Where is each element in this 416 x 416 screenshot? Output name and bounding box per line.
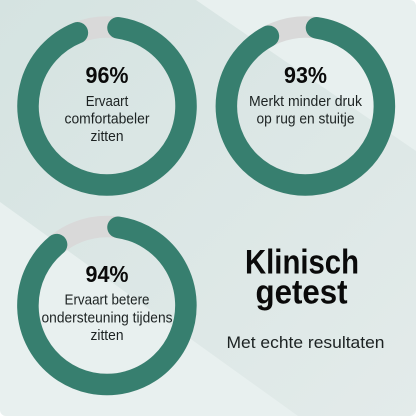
panel: 93% donut <box>226 27 384 185</box>
93% value: 93% <box>284 62 327 88</box>
94% value: 94% <box>86 261 128 287</box>
96% label <box>64 93 150 145</box>
96% value: 96% <box>86 62 128 88</box>
96% label: zitten <box>90 128 124 145</box>
96% track <box>28 27 186 185</box>
96% label: comfortabeler <box>64 110 150 128</box>
title: Klinisch <box>245 244 359 282</box>
panel: 94% donut <box>28 226 186 385</box>
panel: 96% donut <box>28 27 186 185</box>
93% label <box>249 93 362 128</box>
93% arc <box>226 28 384 185</box>
96% arc <box>28 28 186 185</box>
96% label: Ervaart <box>86 93 129 110</box>
94% arc <box>28 227 186 385</box>
subtitle: Met echte resultaten <box>226 333 384 352</box>
title <box>245 244 359 312</box>
title: getest <box>256 274 348 312</box>
94% track <box>28 226 186 384</box>
94% label: Ervaart betere <box>64 292 150 309</box>
93% track <box>226 27 384 185</box>
93% label: op rug en stuitje <box>256 110 354 128</box>
94% label <box>42 292 172 344</box>
93% label: Merkt minder druk <box>249 93 362 110</box>
94% label: ondersteuning tijdens <box>42 309 172 326</box>
94% label: zitten <box>90 327 124 344</box>
